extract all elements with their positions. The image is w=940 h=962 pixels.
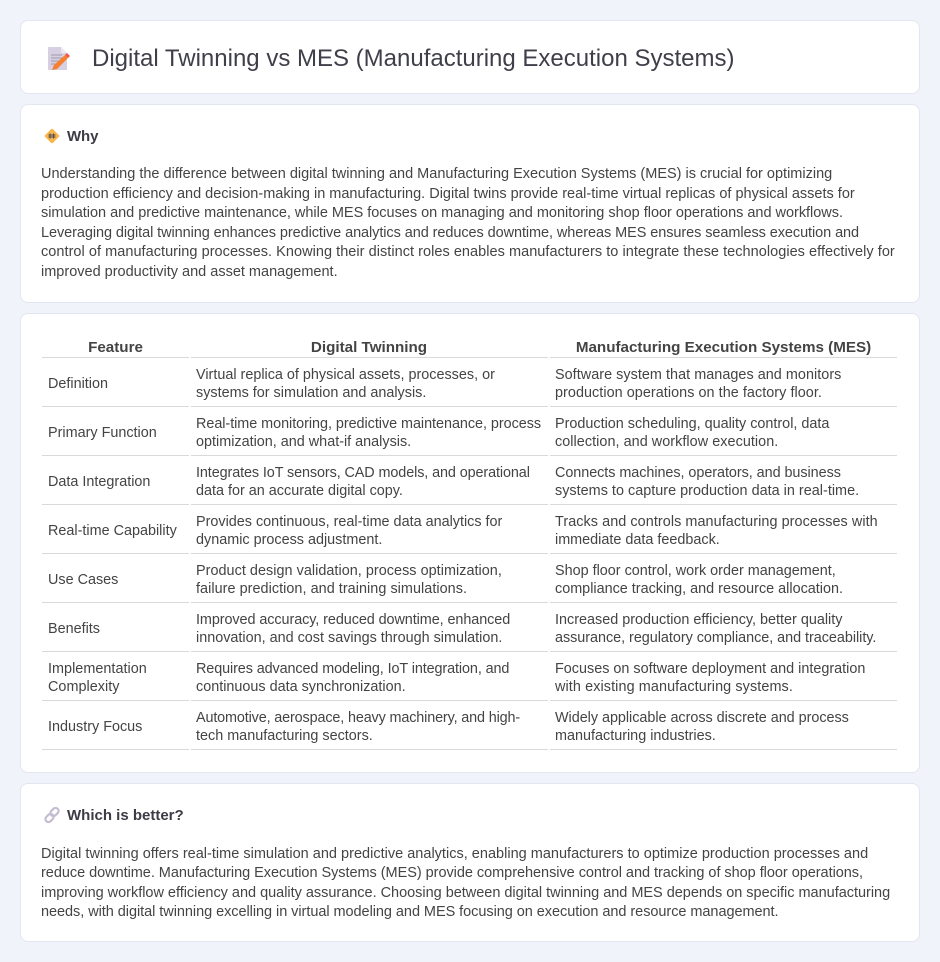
table header: MES: Manufacturing Execution Systems (MES) bbox=[576, 339, 871, 356]
text: which is better paragraph: Digital twinning offers real-time simulation and predictive analytics, enabling manufacturers to optimize production processes and bbox=[41, 846, 868, 862]
panel: which is better bbox=[20, 783, 920, 942]
text: why paragraph: control of manufacturing processes. Knowing their distinct roles enables manufacturers to integrate these technologies effectively for bbox=[41, 244, 895, 260]
table row: implementation complexity: Requires advanced modeling, IoT integration, and bbox=[196, 661, 509, 677]
table row: data integration: Integrates IoT sensors, CAD models, and operational bbox=[196, 465, 530, 481]
text: why paragraph: improved productivity and asset management. bbox=[41, 264, 338, 280]
table row: implementation complexity: Complexity bbox=[48, 679, 119, 695]
table row: use cases: Product design validation, process optimization, bbox=[196, 563, 502, 579]
icon: chain link bbox=[44, 806, 60, 824]
table row: real-time capability: Provides continuous, real-time data analytics for bbox=[196, 514, 502, 530]
table header: digital twinning: Digital Twinning bbox=[311, 339, 427, 356]
text: why paragraph bbox=[41, 166, 895, 280]
table row: data integration bbox=[48, 465, 859, 499]
title: Digital Twinning vs MES (Manufacturing Execution Systems) bbox=[92, 45, 734, 72]
table row: benefits: innovation, and cost savings through simulation. bbox=[196, 630, 502, 646]
table row: industry focus: manufacturing industries. bbox=[555, 728, 716, 744]
table row: industry focus: Industry Focus bbox=[48, 719, 142, 735]
table row: benefits: Improved accuracy, reduced downtime, enhanced bbox=[196, 612, 510, 628]
table row: data integration: systems to capture production data in real-time. bbox=[555, 483, 859, 499]
table row: use cases bbox=[48, 563, 843, 597]
table row: benefits bbox=[48, 612, 876, 646]
table row: use cases: Use Cases bbox=[48, 572, 118, 588]
table row: data integration: Connects machines, operators, and business bbox=[555, 465, 841, 481]
text: which is better paragraph: reduce downtime. Manufacturing Execution Systems (MES) provide comprehensive control and tracking of shop floor operations, bbox=[41, 865, 863, 881]
table row: definition: Virtual replica of physical assets, processes, or bbox=[196, 367, 495, 383]
icon: document with pencil bbox=[48, 47, 70, 70]
text: why paragraph: production efficiency and decision-making in manufacturing. Digital twins provide real-time virtual replicas of physical assets for bbox=[41, 186, 855, 202]
table row: definition: Software system that manages and monitors bbox=[555, 367, 841, 383]
table row: real-time capability bbox=[48, 514, 878, 548]
table row: use cases: failure prediction, and training simulations. bbox=[196, 581, 467, 597]
table row: benefits: Benefits bbox=[48, 621, 100, 637]
text: which is better paragraph: improving workflow efficiency and quality assurance. Choosing between digital twinning and MES depends on specific manufacturing bbox=[41, 885, 890, 901]
table row: primary function bbox=[48, 416, 830, 450]
icon: warning diamond bbox=[44, 128, 60, 144]
table row: industry focus bbox=[48, 710, 849, 744]
table row: real-time capability: dynamic process adjustment. bbox=[196, 532, 382, 548]
table row: definition: production operations on the factory floor. bbox=[555, 385, 822, 401]
table row: industry focus: Widely applicable across discrete and process bbox=[555, 710, 849, 726]
panel: comparison table bbox=[20, 313, 920, 773]
table row: definition: Definition bbox=[48, 376, 108, 392]
table row: primary function: collection, and workflow execution. bbox=[555, 434, 778, 450]
table row: use cases: compliance tracking, and resource allocation. bbox=[555, 581, 843, 597]
table row: implementation complexity bbox=[48, 661, 865, 695]
table row: benefits: Increased production efficiency, better quality bbox=[555, 612, 842, 628]
panel: why bbox=[20, 104, 920, 303]
text: which is better paragraph: needs, with digital twinning excelling in virtual modeling and MES focusing on execution and resource management. bbox=[41, 904, 779, 920]
text: why paragraph: Leveraging digital twinning enhances predictive analytics and reduces downtime, whereas MES ensures seamless execution and bbox=[41, 225, 859, 241]
header card bbox=[20, 20, 920, 94]
table row: data integration: data for an accurate digital copy. bbox=[196, 483, 403, 499]
table rules bbox=[42, 357, 897, 750]
table row: industry focus: tech manufacturing sectors. bbox=[196, 728, 373, 744]
table row: use cases: Shop floor control, work order management, bbox=[555, 563, 836, 579]
text: why paragraph: Understanding the difference between digital twinning and Manufacturing Execution Systems (MES) is crucial for optimizing bbox=[41, 166, 832, 182]
table row: primary function: Production scheduling, quality control, data bbox=[555, 416, 829, 432]
heading: why: Why bbox=[67, 128, 98, 145]
text: why paragraph: simulation and predictive maintenance, while MES focuses on managing and monitoring shop floor operations and workflows. bbox=[41, 205, 843, 221]
table row: implementation complexity: with existing manufacturing systems. bbox=[555, 679, 793, 695]
table row: definition: systems for simulation and analysis. bbox=[196, 385, 426, 401]
table row: primary function: optimization, and what-if analysis. bbox=[196, 434, 411, 450]
table row: real-time capability: immediate data feedback. bbox=[555, 532, 720, 548]
table row: definition bbox=[48, 367, 841, 401]
table header: feature: Feature bbox=[88, 339, 143, 356]
table row: industry focus: Automotive, aerospace, heavy machinery, and high- bbox=[196, 710, 520, 726]
table row: benefits: assurance, regulatory compliance, and traceability. bbox=[555, 630, 876, 646]
heading: which is better: Which is better? bbox=[67, 807, 184, 824]
table row: real-time capability: Tracks and controls manufacturing processes with bbox=[555, 514, 878, 530]
table row: primary function: Real-time monitoring, predictive maintenance, process bbox=[196, 416, 541, 432]
table row: implementation complexity: Implementation bbox=[48, 661, 147, 677]
table row: implementation complexity: Focuses on software deployment and integration bbox=[555, 661, 865, 677]
table row: primary function: Primary Function bbox=[48, 425, 157, 441]
table row: implementation complexity: continuous data synchronization. bbox=[196, 679, 406, 695]
table row: data integration: Data Integration bbox=[48, 474, 150, 490]
table row: real-time capability: Real-time Capability bbox=[48, 523, 177, 539]
